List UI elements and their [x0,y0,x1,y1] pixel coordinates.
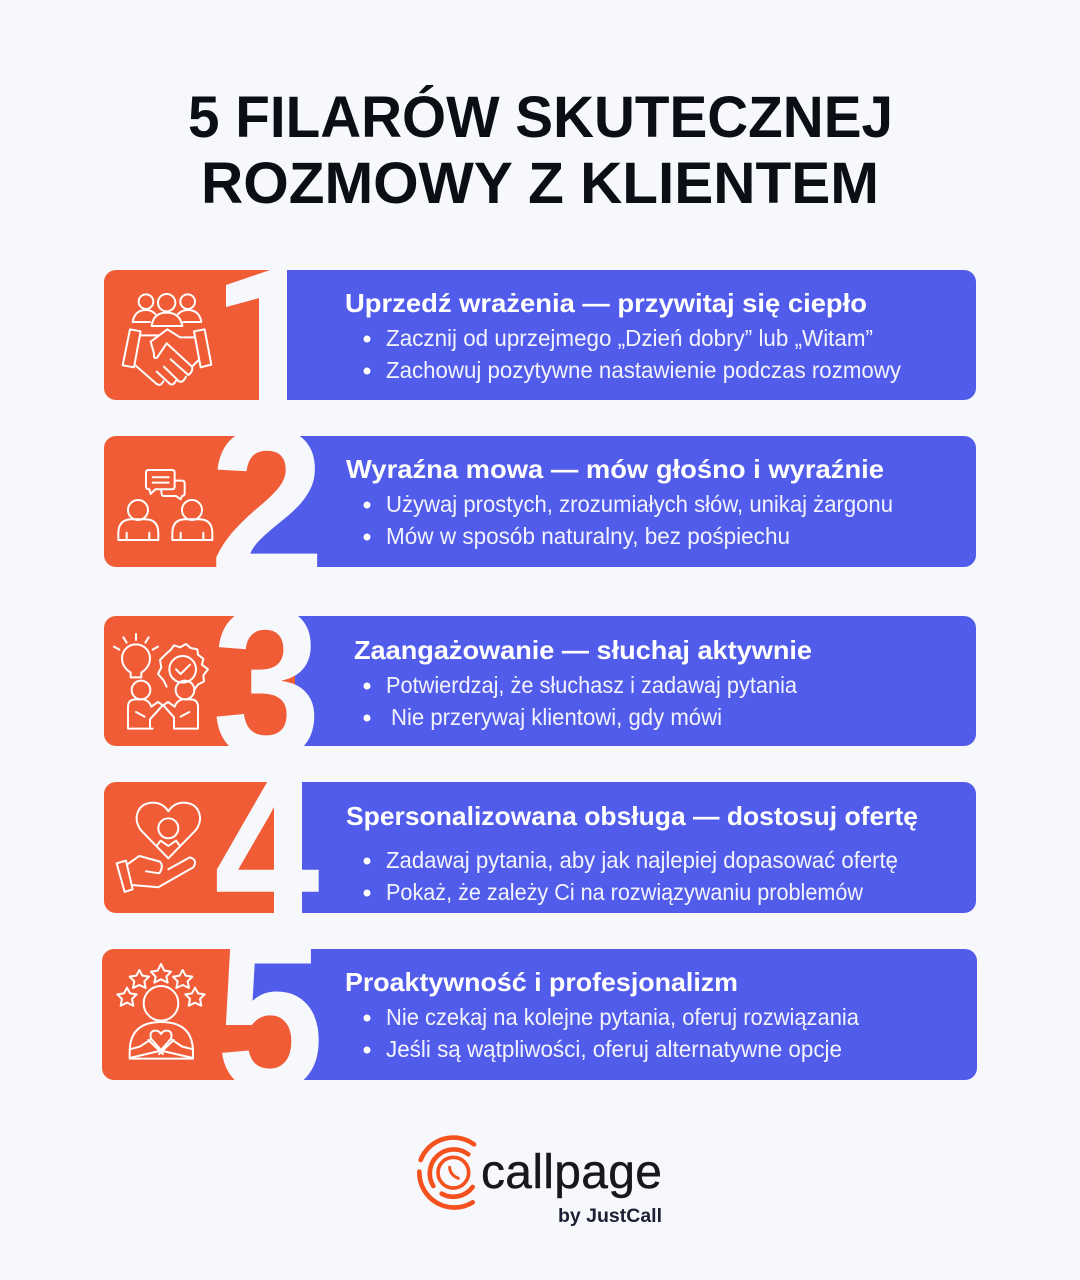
bullets 1 [364,325,901,383]
heading 3: Zaangażowanie — słuchaj aktywnie [354,635,812,665]
title [188,85,893,216]
icon: person with stars and heart [117,964,205,1059]
panel: pillar 2 [104,383,976,625]
icon: heart in open hand [117,803,200,892]
icon: team handshake [123,294,211,385]
panel 1 background [287,270,976,400]
bullets 2: Używaj prostych, zrozumiałych słów, unikaj żargonu [386,491,893,517]
panel 2 background [250,436,976,567]
bullets 3: Potwierdzaj, że słuchasz i zadawaj pytania [386,672,797,698]
panel 4 orange block [104,782,288,913]
icon: two people talking [118,470,212,540]
icon: idea, gear and cooperating people [114,634,208,729]
number 5: 5 [216,894,324,1136]
panel: pillar 1 [104,270,976,400]
icon: callpage concentric arcs [419,1138,474,1208]
bullets 5: Nie czekaj na kolejne pytania, oferuj rozwiązania [386,1004,859,1030]
logo wordmark: callpage [481,1146,662,1199]
panel: pillar 4 [104,728,976,969]
panel: pillar 5 [102,894,977,1136]
number 3: 3 [212,561,321,803]
bullets 1: Zachowuj pozytywne nastawienie podczas rozmowy [386,357,901,383]
bullets 3: Nie przerywaj klientowi, gdy mówi [391,704,722,730]
panel 2 orange block [104,436,297,567]
title: ROZMOWY Z KLIENTEM [201,151,879,216]
heading 2: Wyraźna mowa — mów głośno i wyraźnie [346,454,884,484]
panel 3 orange block [104,616,295,746]
heading 5: Proaktywność i profesjonalizm [345,967,738,997]
bullets 4: Zadawaj pytania, aby jak najlepiej dopasować ofertę [386,847,898,873]
title: 5 FILARÓW SKUTECZNEJ [188,85,893,150]
number 1: 1 [208,229,328,471]
bullets 5 [364,1004,859,1062]
bullets 1: Zacznij od uprzejmego „Dzień dobry” lub „Witam” [386,325,873,351]
heading 4: Spersonalizowana obsługa — dostosuj ofertę [346,801,918,831]
bullets 3 [364,672,797,730]
panel: pillar 3 [104,561,976,803]
number 2: 2 [209,383,326,625]
number 4: 4 [214,728,320,969]
bullets 2: Mów w sposób naturalny, bez pośpiechu [386,523,790,549]
panel 1 orange block [104,270,270,400]
logo byline: by JustCall [558,1206,662,1227]
logo: callpage by JustCall [419,1138,662,1227]
panel 3 background [290,616,976,746]
panel 4 background [288,782,976,913]
bullets 4 [364,847,898,905]
panel 5 orange block [102,949,300,1080]
number 1 [226,270,270,307]
bullets 5: Jeśli są wątpliwości, oferuj alternatywne opcje [386,1036,842,1062]
heading 1: Uprzedź wrażenia — przywitaj się ciepło [345,288,867,318]
bullets 2 [364,491,893,549]
panel 5 background [240,949,977,1080]
bullets 4: Pokaż, że zależy Ci na rozwiązywaniu problemów [386,879,863,905]
